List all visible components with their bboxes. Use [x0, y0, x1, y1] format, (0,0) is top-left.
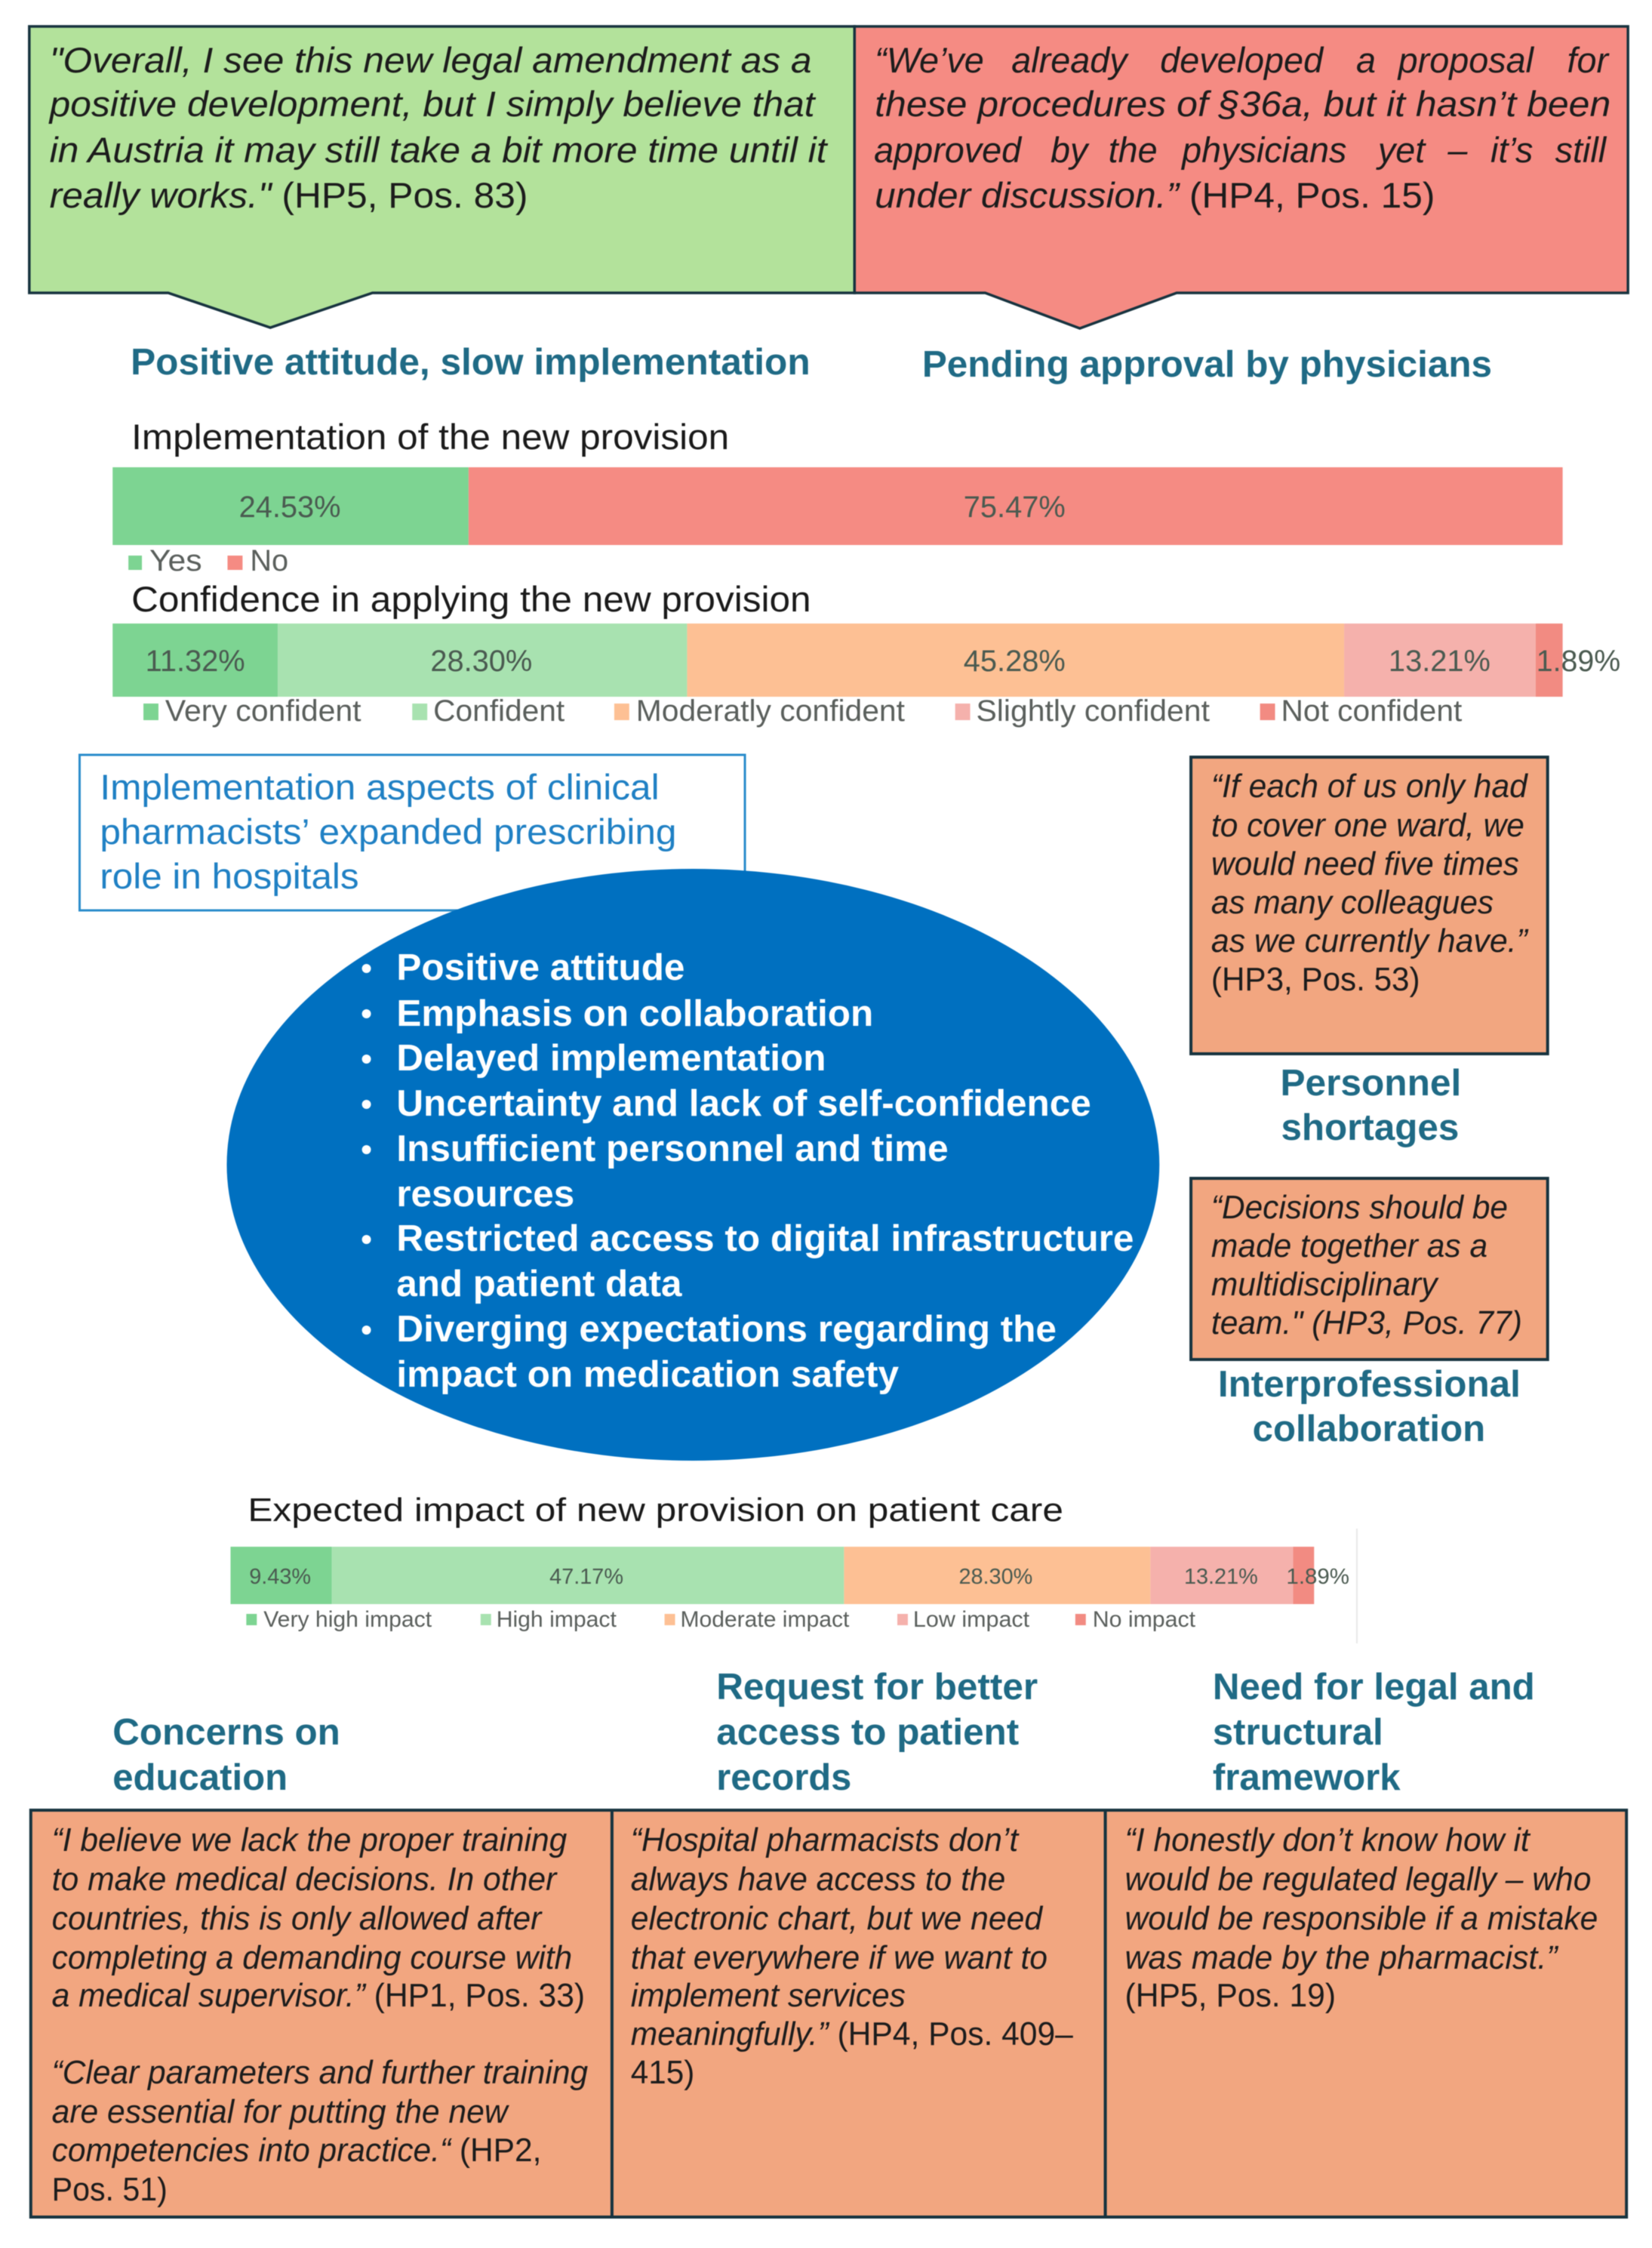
chart title: confidence: Confidence in applying the new provision — [131, 580, 811, 619]
central ellipse: implementation aspects list: Diverging expectations regarding the — [396, 1309, 1057, 1350]
heading: personnel shortages: Personnel — [1280, 1063, 1461, 1104]
panel: legal framework quote: “I honestly don’t know how it — [1125, 1821, 1531, 1858]
panel: personnel shortages quote: to cover one ward, we — [1211, 807, 1524, 844]
panel: pending approval quote: proposal — [1397, 41, 1535, 80]
bar chart: implementation — [112, 467, 1563, 545]
heading: need for legal and structural framework — [1213, 1667, 1535, 1798]
bar chart: implementation: 24.53% — [239, 491, 341, 524]
chart title: implementation: Implementation of the new provision — [131, 417, 729, 457]
heading: interprofessional collaboration — [1218, 1364, 1521, 1449]
panel: education quotes: completing a demanding course with — [52, 1939, 572, 1976]
panel: patient records quote: meaningfully.” (HP4, Pos. 409– — [631, 2016, 1073, 2052]
heading: request for better access: Request for better — [716, 1667, 1038, 1708]
legend: confidence: Confident — [433, 694, 565, 728]
panel: patient records quote: implement services — [631, 1977, 906, 2014]
bar chart: expected impact: 13.21% — [1184, 1565, 1258, 1589]
panel: positive attitude quote: positive development, but I simply believe that — [48, 85, 817, 124]
bar chart: confidence: 11.32% — [146, 645, 245, 678]
central ellipse: implementation aspects list: resources — [396, 1174, 574, 1215]
panel: positive attitude quote — [29, 26, 854, 328]
legend: implementation: Yes — [149, 544, 202, 577]
heading: request for better access: records — [716, 1757, 851, 1798]
panel: education quotes: a medical supervisor.” (HP1, Pos. 33) — [52, 1977, 585, 2014]
heading: pending approval by physicians: Pending approval by physicians — [922, 344, 1492, 385]
heading: need for legal and structural framework: framework — [1213, 1757, 1401, 1798]
bar chart: implementation: 75.47% — [964, 491, 1066, 524]
central ellipse: implementation aspects list — [226, 869, 1159, 1461]
legend: expected impact: No impact — [1093, 1607, 1196, 1632]
panel: patient records quote — [612, 1810, 1106, 2217]
bar chart: expected impact: 1.89% — [1286, 1565, 1349, 1589]
heading: request for better access: access to patient — [716, 1712, 1019, 1753]
panel: education quotes: are essential for putting the new — [52, 2093, 510, 2130]
heading: need for legal and structural framework: Need for legal and — [1213, 1667, 1535, 1708]
panel: personnel shortages quote — [1191, 757, 1548, 1054]
panel: interprofessional collaboration quote: “Decisions should be — [1211, 1189, 1508, 1226]
panel: pending approval quote: yet — [1376, 131, 1426, 170]
legend: implementation: No — [250, 544, 288, 577]
panel: legal framework quote: (HP5, Pos. 19) — [1125, 1977, 1336, 2014]
heading: personnel shortages — [1280, 1063, 1461, 1148]
panel: pending approval quote: by — [1051, 131, 1090, 170]
heading: request for better access — [716, 1667, 1038, 1798]
panel: pending approval quote — [854, 26, 1628, 328]
legend: confidence: Slightly confident — [977, 694, 1210, 728]
panel: positive attitude quote: "Overall, I see this new legal amendment as a — [50, 41, 812, 80]
panel: patient records quote: electronic chart, but we need — [631, 1900, 1044, 1937]
legend: expected impact: Low impact — [913, 1607, 1030, 1632]
heading: positive attitude, slow implementation: Positive attitude, slow implementation — [131, 342, 811, 383]
panel: patient records quote: always have access to the — [631, 1861, 1005, 1898]
panel: pending approval quote: physicians — [1180, 131, 1346, 170]
panel: legal framework quote: was made by the pharmacist.” — [1125, 1939, 1559, 1976]
bar chart: confidence: 28.30% — [430, 645, 532, 678]
heading: personnel shortages: shortages — [1281, 1107, 1459, 1148]
legend: confidence: Not confident — [1281, 694, 1462, 728]
panel: pending approval quote: the — [1109, 131, 1158, 170]
bar chart: expected impact: 47.17% — [549, 1565, 623, 1589]
panel: positive attitude quote: in Austria it may still take a bit more time until it — [50, 131, 829, 170]
central ellipse: implementation aspects list: Insufficient personnel and time — [396, 1129, 949, 1169]
panel: pending approval quote: still — [1555, 131, 1607, 170]
legend: confidence: Very confident — [165, 694, 361, 728]
legend: expected impact: High impact — [497, 1607, 617, 1632]
panel: education quotes: “I believe we lack the proper training — [52, 1821, 568, 1858]
panel: pending approval quote: for — [1567, 41, 1610, 80]
bar chart: confidence: 1.89% — [1537, 645, 1620, 678]
bar chart: expected impact — [230, 1529, 1357, 1643]
panel: pending approval quote: developed — [1160, 41, 1324, 80]
panel: personnel shortages quote: “If each of us only had — [1211, 768, 1528, 805]
title box: implementation aspects — [79, 755, 745, 910]
legend: expected impact: Moderate impact — [680, 1607, 850, 1632]
panel: education quotes: competencies into practice.“ (HP2, — [52, 2132, 541, 2169]
panel: interprofessional collaboration quote: multidisciplinary — [1211, 1266, 1439, 1303]
panel: patient records quote: that everywhere if we want to — [631, 1939, 1047, 1976]
title box: implementation aspects: Implementation aspects of clinical — [100, 768, 660, 807]
panel: interprofessional collaboration quote: made together as a — [1211, 1227, 1487, 1264]
panel: pending approval quote: – — [1447, 131, 1468, 170]
heading: concerns on education: Concerns on — [112, 1712, 340, 1753]
heading: concerns on education: education — [112, 1757, 288, 1798]
bar chart: expected impact: 28.30% — [958, 1565, 1032, 1589]
title box: implementation aspects: pharmacists’ expanded prescribing — [100, 812, 676, 851]
panel: personnel shortages quote: (HP3, Pos. 53) — [1211, 961, 1420, 998]
heading: need for legal and structural framework: structural — [1213, 1712, 1383, 1753]
panel: patient records quote: “Hospital pharmacists don’t — [631, 1821, 1020, 1858]
central ellipse: implementation aspects list: Restricted access to digital infrastructure — [396, 1218, 1134, 1259]
panel: pending approval quote: a — [1356, 41, 1376, 80]
central ellipse: implementation aspects list: Positive attitude — [396, 947, 684, 988]
panel: patient records quote: 415) — [631, 2054, 694, 2091]
panel: personnel shortages quote: would need five times — [1211, 845, 1519, 882]
legend: expected impact: Very high impact — [263, 1607, 432, 1632]
bar chart: confidence: 45.28% — [964, 645, 1066, 678]
legend: confidence — [143, 694, 1462, 728]
panel: pending approval quote: already — [1011, 41, 1129, 80]
bar chart: confidence — [112, 624, 1620, 697]
panel: legal framework quote: would be responsible if a mistake — [1125, 1900, 1598, 1937]
central ellipse: implementation aspects list: Delayed implementation — [396, 1038, 826, 1079]
bar chart: confidence: 13.21% — [1389, 645, 1490, 678]
panel: interprofessional collaboration quote: team." (HP3, Pos. 77) — [1211, 1304, 1522, 1341]
central ellipse: implementation aspects list: Uncertainty and lack of self-confidence — [396, 1083, 1091, 1124]
panel: positive attitude quote: really works." (HP5, Pos. 83) — [50, 176, 528, 215]
panel: pending approval quote: “We’ve — [875, 41, 984, 80]
central ellipse: implementation aspects list: impact on medication safety — [396, 1354, 899, 1395]
chart title: expected impact: Expected impact of new provision on patient care — [248, 1492, 1063, 1529]
bar chart: expected impact: 9.43% — [249, 1565, 311, 1589]
legend: implementation — [128, 544, 288, 577]
heading: interprofessional collaboration: Interprofessional — [1218, 1364, 1521, 1405]
central ellipse: implementation aspects list: Emphasis on collaboration — [396, 993, 873, 1034]
panel: personnel shortages quote: as we currently have.” — [1211, 922, 1529, 959]
panel: pending approval quote: under discussion.” (HP4, Pos. 15) — [875, 176, 1435, 215]
panel: education quotes: “Clear parameters and further training — [52, 2054, 589, 2091]
heading: concerns on education — [112, 1712, 340, 1798]
panel: education quotes: countries, this is only allowed after — [52, 1900, 543, 1937]
panel: legal framework quote — [1106, 1810, 1626, 2217]
legend: expected impact — [246, 1607, 1196, 1632]
panel: interprofessional collaboration quote — [1191, 1178, 1548, 1360]
central ellipse: implementation aspects list: and patient data — [396, 1264, 682, 1304]
panel: legal framework quote: would be regulated legally – who — [1125, 1861, 1591, 1898]
panel: pending approval quote: it’s — [1490, 131, 1533, 170]
panel: personnel shortages quote: as many colleagues — [1211, 884, 1494, 921]
heading: interprofessional collaboration: collaboration — [1253, 1409, 1485, 1449]
panel: education quotes: to make medical decisions. In other — [52, 1861, 558, 1898]
panel: education quotes — [31, 1810, 612, 2217]
panel: education quotes: Pos. 51) — [52, 2171, 168, 2208]
panel: pending approval quote: approved — [874, 131, 1023, 170]
panel: pending approval quote: these procedures of §36a, but it hasn’t been — [875, 85, 1610, 124]
legend: confidence: Moderatly confident — [636, 694, 905, 728]
title box: implementation aspects: role in hospitals — [100, 857, 359, 896]
